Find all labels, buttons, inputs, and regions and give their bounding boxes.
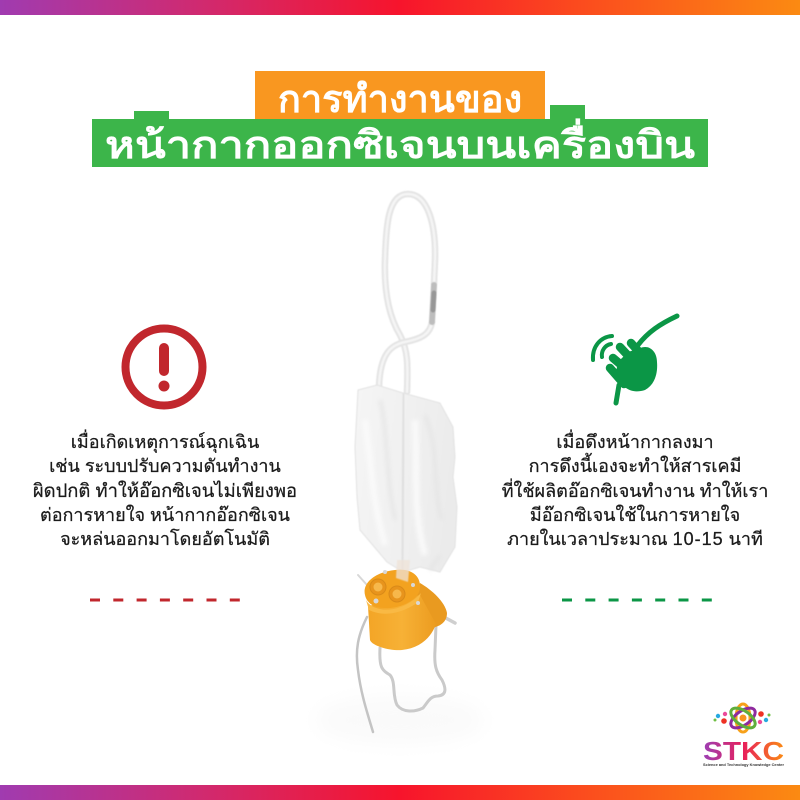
bottom gradient bar bbox=[0, 785, 800, 800]
title line 2 on green box bbox=[92, 105, 708, 167]
logo atom bbox=[714, 704, 770, 732]
text: when mask is pulled: การดึงนี้เองจะทำให้สารเคมี bbox=[529, 456, 741, 476]
text: when emergency occurs: จะหล่นออกมาโดยอัตโนมัติ bbox=[60, 529, 270, 549]
text: when mask is pulled: ภายในเวลาประมาณ 10-15 นาที bbox=[507, 529, 763, 549]
reservoir bag bbox=[355, 385, 457, 572]
elastic straps bbox=[357, 575, 455, 732]
text: when mask is pulled: มีอ๊อกซิเจนใช้ในการหายใจ bbox=[530, 505, 740, 525]
text: when emergency occurs: ต่อการหายใจ หน้ากากอ๊อกซิเจน bbox=[40, 505, 290, 525]
icon: hand pulling cord bbox=[590, 314, 680, 406]
oxygen mask illustration bbox=[354, 190, 458, 734]
title line 1 on orange box bbox=[255, 71, 545, 120]
green dashed divider bbox=[562, 598, 712, 602]
text: when emergency occurs: ผิดปกติ ทำให้อ๊อกซิเจนไม่เพียงพอ bbox=[33, 480, 297, 501]
text: when emergency occurs: เช่น ระบบปรับความดันทำงาน bbox=[49, 456, 281, 476]
oxygen tube bbox=[379, 194, 435, 392]
text: when mask is pulled: ที่ใช้ผลิตอ๊อกซิเจนทำงาน ทำให้เรา bbox=[502, 481, 768, 501]
title line 2 on green box: หน้ากากออกซิเจนบนเครื่องบิน bbox=[105, 125, 695, 167]
title line 1 on orange box: การทำงานของ bbox=[278, 79, 522, 121]
logo wordmark: STKC bbox=[703, 736, 784, 766]
logo: STKC bbox=[703, 702, 784, 767]
logo tagline: Science and Technology Knowledge Center bbox=[703, 762, 784, 767]
top gradient bar bbox=[0, 0, 800, 15]
icon: alert exclamation bbox=[122, 324, 206, 410]
mask cup bbox=[365, 560, 447, 650]
text: when emergency occurs: เมื่อเกิดเหตุการณ์ฉุกเฉิน bbox=[71, 432, 259, 452]
text: when mask is pulled: เมื่อดึงหน้ากากลงมา bbox=[556, 432, 714, 452]
title bbox=[92, 71, 708, 167]
text: when emergency occurs bbox=[33, 429, 297, 549]
floor shadow bbox=[315, 696, 485, 744]
red dashed divider bbox=[90, 598, 240, 602]
text: when mask is pulled bbox=[502, 429, 768, 549]
